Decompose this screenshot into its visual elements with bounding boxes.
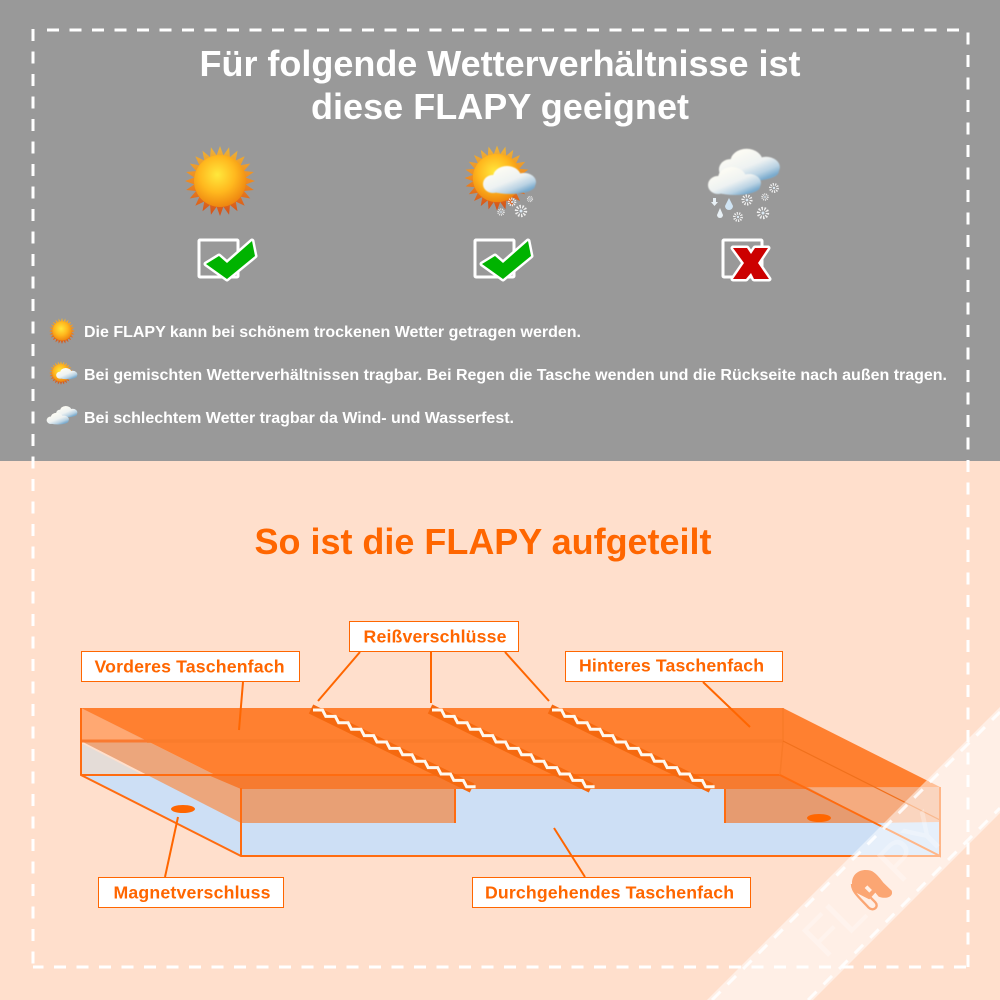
icon: sun with cloud and snow bbox=[464, 145, 536, 216]
watermark: FLAPY ribbon bbox=[707, 707, 1000, 1000]
front left pocket bbox=[241, 787, 455, 823]
title: weather suitability bbox=[200, 43, 800, 127]
icon: check mark sunny bbox=[199, 240, 255, 279]
magnet left bbox=[171, 805, 195, 813]
compartment front blue bbox=[241, 788, 940, 856]
text: dry weather: Die FLAPY kann bei schönem trockenen Wetter getragen werden. bbox=[84, 324, 581, 341]
bottom compartment blue bbox=[81, 775, 940, 856]
panel: weather background bbox=[0, 0, 1000, 461]
label: front pocket: Vorderes Taschenfach bbox=[94, 656, 284, 676]
label: rear pocket bbox=[566, 652, 782, 682]
icon: small sun bbox=[49, 318, 75, 344]
zipper middle bbox=[430, 709, 595, 788]
title: weather suitability: diese FLAPY geeignet bbox=[311, 86, 689, 127]
label: zippers bbox=[350, 622, 518, 652]
left wall bbox=[81, 708, 241, 823]
leader lines bbox=[165, 652, 750, 877]
label: zippers: Reißverschlüsse bbox=[364, 626, 507, 646]
label: rear pocket: Hinteres Taschenfach bbox=[579, 656, 764, 676]
label: magnet: Magnetverschluss bbox=[114, 882, 271, 902]
icon: small sun with cloud bbox=[49, 361, 77, 385]
magnet right bbox=[807, 814, 831, 822]
watermark text: PY bbox=[866, 800, 959, 894]
diagram: bag compartments bbox=[81, 708, 940, 856]
zipper right bbox=[550, 709, 715, 788]
title: weather suitability: Für folgende Wetterverhältnisse ist bbox=[200, 43, 800, 84]
icon: cross bad weather bbox=[723, 240, 769, 279]
watermark logo bbox=[852, 870, 892, 909]
label: front pocket bbox=[82, 652, 300, 682]
icon: cloud with rain and snow bbox=[708, 149, 780, 221]
text: bad weather: Bei schlechtem Wetter tragbar da Wind- und Wasserfest. bbox=[84, 410, 514, 427]
label: continuous pocket bbox=[472, 878, 750, 908]
heading: compartments: So ist die FLAPY aufgeteilt bbox=[254, 521, 712, 562]
watermark text bbox=[791, 800, 959, 968]
icon: check mark mixed bbox=[475, 240, 531, 279]
watermark text: FL bbox=[791, 881, 878, 968]
label: continuous pocket: Durchgehendes Taschenfach bbox=[485, 882, 734, 902]
icon: small cloud bbox=[47, 406, 77, 424]
top surface bbox=[81, 708, 940, 788]
label: magnet bbox=[98, 878, 284, 908]
zipper left bbox=[311, 709, 476, 788]
panel: compartments background bbox=[0, 461, 1000, 1000]
icon: sun bbox=[185, 146, 255, 216]
text: mixed weather: Bei gemischten Wetterverhältnissen tragbar. Bei Regen die Tasche wenden und die Rückseite nach außen tragen. bbox=[84, 367, 947, 384]
front right pocket bbox=[725, 787, 875, 823]
